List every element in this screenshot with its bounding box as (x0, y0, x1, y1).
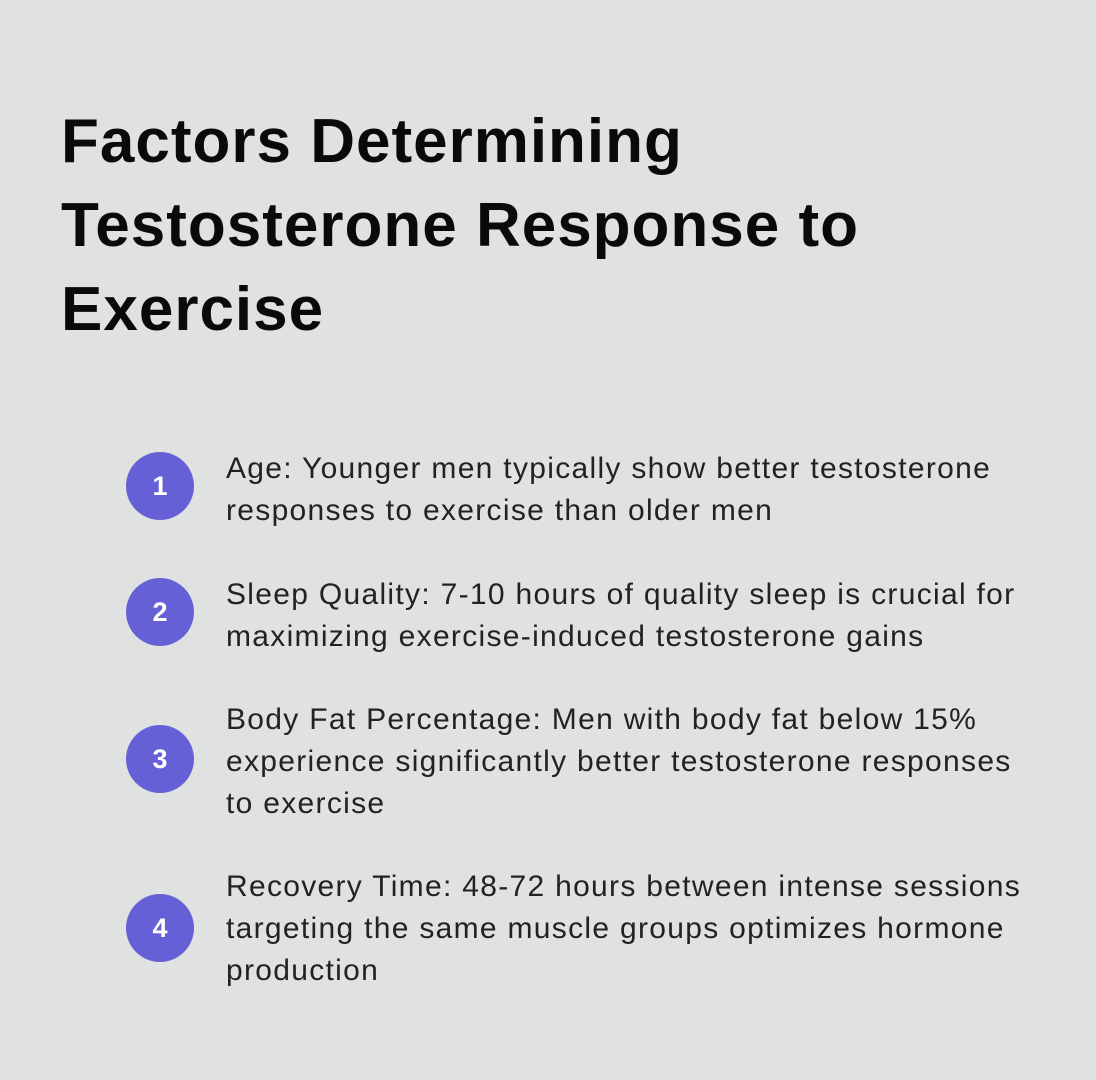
title: Testosterone Response to (61, 191, 859, 260)
circle 3 (126, 725, 194, 793)
text 1 (226, 452, 991, 527)
circle 2 (126, 578, 194, 646)
title: Exercise (61, 275, 324, 344)
item 2: sleep (126, 578, 1015, 653)
item 1: age (126, 452, 991, 527)
text 1: Age: Younger men typically show better testosterone (226, 452, 991, 485)
text 4 (226, 870, 1021, 987)
text 3 (226, 703, 1012, 820)
text 4: targeting the same muscle groups optimizes hormone (226, 912, 1005, 945)
title (61, 107, 859, 344)
text 3: experience significantly better testosterone responses (226, 745, 1012, 778)
item 4: recovery (126, 870, 1021, 987)
circle 3: 3 (152, 744, 168, 774)
circle 4 (126, 894, 194, 962)
title: Factors Determining (61, 107, 683, 176)
text 1: responses to exercise than older men (226, 494, 773, 527)
text 2 (226, 578, 1015, 653)
circle 2: 2 (152, 597, 168, 627)
item 3: body fat (126, 703, 1012, 820)
circle 4: 4 (152, 913, 168, 943)
text 3: Body Fat Percentage: Men with body fat below 15% (226, 703, 977, 736)
circle 1 (126, 452, 194, 520)
text 4: Recovery Time: 48-72 hours between intense sessions (226, 870, 1021, 903)
text 2: maximizing exercise-induced testosterone gains (226, 620, 924, 653)
circle 1: 1 (152, 471, 168, 501)
text 4: production (226, 954, 379, 987)
text 3: to exercise (226, 787, 385, 820)
text 2: Sleep Quality: 7-10 hours of quality sleep is crucial for (226, 578, 1015, 611)
